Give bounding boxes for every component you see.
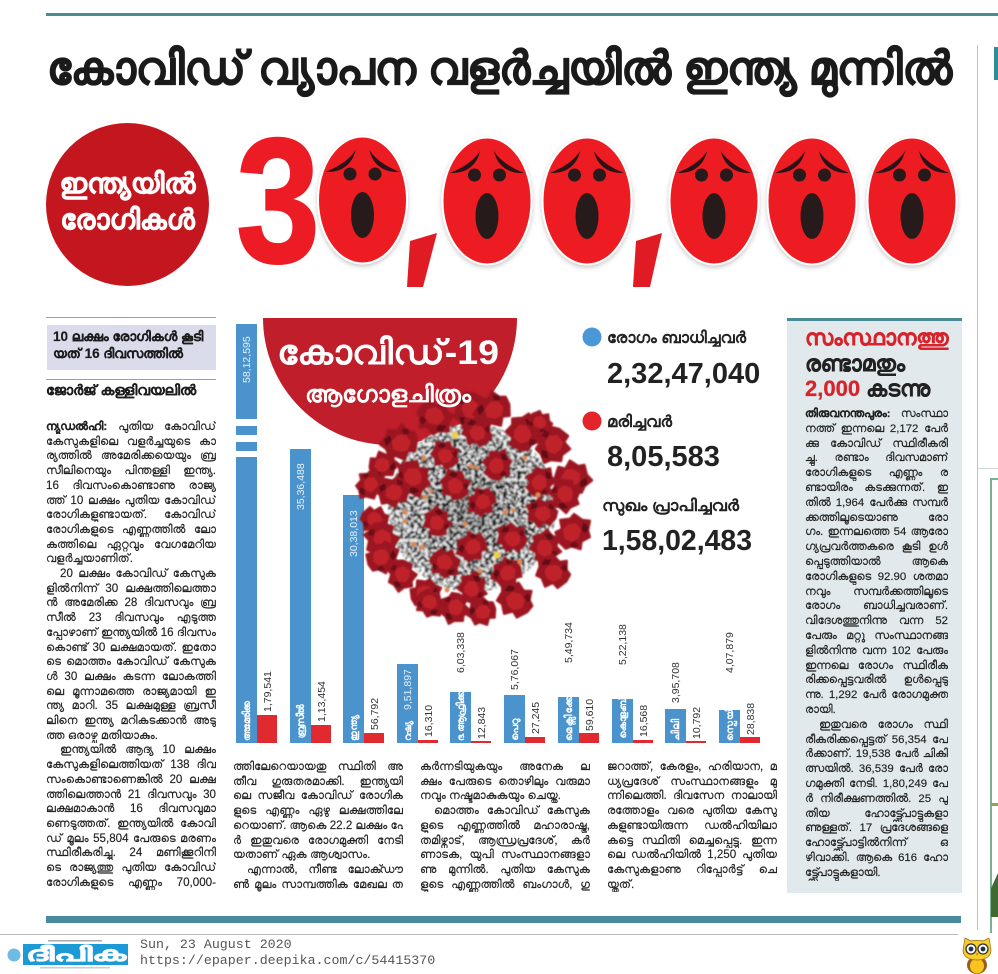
bar chart: country totals	[236, 324, 760, 743]
article column 1: സീൽ 23 ദിവസവും എടുത്ത	[46, 611, 216, 624]
sidebar article: ഴിവാക്കി. ആകെ 616 ഹോ	[805, 852, 948, 864]
article column 1: ടെ രാജ്യത്തു പുതിയ കോവിഡ്	[46, 861, 216, 874]
article column 4: രത്തോളം വരെ പുതിയ കേസു	[607, 804, 777, 817]
sidebar article: ളിൽനിന്നു വന്ന 102 പേരും	[805, 645, 948, 657]
article column 4: കട്ടെ സ്ഥിതി മെച്ചപ്പെട്ടു. ഇന്ന	[607, 834, 777, 846]
article column 1	[46, 420, 216, 890]
article column 3: മൊത്തം കോവിഡ് കേസുക	[434, 804, 590, 817]
bar group: Mexico	[558, 622, 599, 743]
bar group: Brazil: ബ്രസീൽ	[294, 703, 307, 738]
global picture subheading: ആഗോളചിത്രം	[305, 381, 472, 408]
article column 2: എന്നാൽ, നീണ്ട ലോക്ഡൗ	[247, 863, 403, 876]
bar group: Brazil	[290, 449, 331, 743]
sidebar article: രോഗം ബാധിച്ചവരാണ്.	[805, 600, 948, 612]
badge: patients in India	[46, 123, 209, 286]
bar group: Colombia	[612, 624, 653, 743]
article column 4: ന്നിലെത്തി. ദിവസേന നാലായി	[607, 789, 777, 802]
article column 1: ൻ അമേരിക്ക 28 ദിവസവും ബ്ര	[46, 596, 216, 609]
sidebar article: ഇതുവരെ രോഗം സ്ഥി	[819, 719, 948, 731]
footer divider	[0, 934, 958, 935]
article column 2: ൺ മൂലം സാമ്പത്തിക മേഖല ത	[233, 878, 403, 891]
bar group: Chile: ചിലി	[669, 718, 682, 741]
article column 2: ലെ സജീവ കോവിഡ് രോഗിക	[233, 789, 403, 802]
red title semicircle	[263, 318, 517, 445]
bar group: Chile: 3,95,708	[670, 662, 682, 703]
article column 1: രോഗികളുടെ എണ്ണം 70,000-	[46, 876, 216, 889]
bar group: India: 30,38,013	[348, 510, 360, 557]
article column 1: ടെ മൊത്തം കോവിഡ് കേസുക	[46, 655, 216, 668]
covid-19 heading: കോവിഡ്-19	[277, 334, 499, 372]
bar group: Spain: 28,838	[745, 703, 757, 735]
article column 4: യ്തത്.	[607, 878, 634, 891]
sidebar article: ണ്ടായിരം കടക്കുന്നത്. ഇ	[805, 482, 948, 494]
article column 1: ന്ത്യ മാറി. 35 ലക്ഷമുള്ള ബ്രസീ	[46, 699, 216, 712]
bar group: USA: അമേരിക്ക	[240, 700, 253, 741]
sidebar article: നവും സമ്പർക്കത്തിലൂടെ	[805, 586, 948, 598]
bar group: India	[343, 495, 384, 743]
article column 2: ളുടെ എണ്ണം ഏഴു ലക്ഷത്തിലേ	[233, 804, 403, 817]
subhead rule top	[46, 317, 216, 318]
sidebar heading: സംസ്ഥാനത്തു	[805, 325, 949, 350]
sidebar article: ത്സയിൽ. 36,539 പേർ രോ	[805, 763, 948, 775]
bar group: Chile	[665, 662, 706, 743]
bar group: India: ഇന്ത്യ	[349, 715, 361, 741]
bar group: Russia: 9,51,897	[402, 669, 414, 710]
legend: recovered: സുഖം പ്രാപിച്ചവർ	[602, 497, 740, 516]
article column 1: ത്ത ഒരാഴ്ച മതിയാകും.	[46, 729, 158, 742]
article column 1: ഡ് മൂലം 55,804 പേരുടെ മരണം	[46, 832, 216, 845]
source date: Sun, 23 August 2020	[140, 937, 292, 952]
article column 3: കർന്നടിയുകയും അനേക ല	[420, 760, 590, 773]
bar group: Colombia: കൊളംബിയ	[616, 688, 629, 738]
article column 1: ണെടുത്തത്. ഇന്ത്യയിൽ കോവി	[46, 817, 216, 830]
legend: deaths: മരിച്ചവർ	[607, 413, 673, 431]
panel: state news sidebar	[787, 318, 962, 893]
sidebar article: തിയ ഹോട്ട്സ്പോട്ടുകളാ	[805, 808, 948, 820]
article column 3: ണാടക, യുപി സംസ്ഥാനങ്ങളാ	[420, 848, 590, 861]
bar group: Mexico: 59,610	[584, 699, 596, 731]
bar group: Peru: പെറു	[510, 718, 522, 741]
article column 4: കേസുകളാണു റിപ്പോർട്ട് ചെ	[607, 863, 777, 876]
sidebar article: ന്നു. 1,292 പേർ രോഗമുക്ത	[805, 689, 948, 701]
sidebar article: രിക്കപ്പെട്ടവരിൽ ഉൾപ്പെടു	[805, 674, 948, 686]
bar group: Spain: സ്പെയിൻ	[723, 696, 737, 741]
logo: Deepika	[8, 940, 128, 968]
badge: patients in India: ഇന്ത്യയിൽ	[60, 168, 195, 199]
bar group: USA: 58,12,595	[241, 336, 253, 383]
legend: infected	[582, 328, 760, 390]
face zero 5	[768, 138, 856, 264]
face zero 4	[670, 138, 758, 264]
left subhead box: യത് 16 ദിവസത്തിൽ	[53, 346, 183, 361]
sidebar article: ട്ട്സ്പോട്ടുകളായി.	[805, 867, 881, 879]
sidebar article: പേരും മറ്റു സംസ്ഥാനങ്ങ	[805, 630, 948, 642]
article column 1: ഇന്ത്യയിൽ ആദ്യ 10 ലക്ഷം	[60, 743, 216, 756]
article column 1: ത്ത് 10 ലക്ഷം പുതിയ കോവിഡ്	[46, 494, 216, 506]
bar group: South Africa: 12,843	[476, 707, 488, 739]
article column 3: ണു മുന്നിൽ. പുതിയ കേസുക	[420, 863, 590, 876]
article column 1: 20 ലക്ഷം കോവിഡ് കേസുക	[60, 567, 216, 580]
badge: patients in India: രോഗികൾ	[60, 204, 195, 235]
sidebar article: രോഗികളുടെ 92.90 ശതമാ	[805, 571, 948, 583]
neighbouring twig	[991, 803, 998, 806]
article column 4: ജറാത്ത്, കേരളം, ഹരിയാന, മ	[607, 760, 777, 773]
article column 1: ലക്ഷമാകാൻ 16 ദിവസവുമാ	[46, 802, 216, 815]
sidebar article: ഗമുക്തി നേടി. 1,80,249 പേ	[805, 778, 948, 790]
article column 3: തമിഴ്നാട്, ആന്ധ്രപ്രദേശ്, കർ	[420, 834, 590, 846]
legend: infected: രോഗം ബാധിച്ചവർ	[607, 329, 747, 347]
sidebar article: പ്പെടുത്തിയാൽ ആകെ	[805, 556, 948, 568]
article column 3	[420, 760, 590, 892]
article column 1: രോഗികളുടെ എണ്ണത്തിൽ ലോ	[46, 523, 216, 536]
article column 1: ൾ 30 ലക്ഷം കടന്ന ലോകത്തി	[46, 670, 216, 683]
bar group: Colombia: 16,568	[638, 705, 650, 737]
face zero 2	[442, 138, 532, 264]
bar group: USA	[236, 324, 277, 743]
chart panel: global picture	[236, 318, 760, 743]
logo wordmark: ദീപിക	[26, 943, 128, 966]
article column 1: ന്യൂഡൽഹി: പുതിയ കോവിഡ്	[46, 420, 216, 433]
article column 2: യതാണ് ഏക ആശ്വാസം.	[233, 848, 370, 861]
article column 1: സീലിനെയും പിന്തള്ളി ഇന്ത്യ.	[46, 464, 216, 477]
bar group: Russia: റഷ്യ	[403, 721, 415, 741]
bar group: Mexico: മെക്സിക്കോ	[562, 690, 577, 741]
right margin rule	[977, 45, 978, 930]
sidebar article: ഗ്യപ്രവർത്തകരെ കൂടി ഉൾ	[805, 541, 948, 553]
article column 1: ത്തിലെത്താൻ 21 ദിവസവും 30	[46, 788, 216, 800]
neighbouring article box	[990, 478, 998, 933]
article column 3: നവും നഷ്ടമാകുകയും ചെയ്തു.	[420, 789, 561, 802]
article column 3: ളുടെ എണ്ണത്തിൽ മഹാരാഷ്ട്ര,	[420, 819, 590, 832]
article column 2: തീവ ഗുരുതരമാക്കി. ഇന്ത്യയി	[233, 775, 403, 788]
sidebar article: ർ നിരീക്ഷണത്തിൽ. 25 പു	[805, 793, 948, 805]
article column 1: കത്തിലെ ഏറ്റവും വേഗമേറിയ	[46, 538, 216, 551]
article column 1: ലെ മൂന്നാമത്തെ രാജ്യമായി ഇ	[46, 685, 216, 698]
sidebar article: ണുള്ളത്. 17 പ്രദേശങ്ങളെ	[805, 822, 948, 834]
sidebar heading	[805, 325, 950, 401]
bar group: Chile: 10,792	[691, 707, 703, 739]
bar group: South Africa: 6,03,338	[455, 632, 467, 673]
article column 1: സംകൊണ്ടാണെങ്കിൽ 20 ലക്ഷ	[46, 773, 216, 786]
article column 2: റെയാണ്. ആകെ 22.2 ലക്ഷം പേ	[233, 819, 403, 832]
byline: ജോർജ് കള്ളിവയലിൽ	[46, 383, 196, 399]
sidebar article: രോഗികളുടെ എണ്ണം ര	[805, 467, 948, 479]
legend: infected: 2,32,47,040	[607, 358, 760, 390]
legend: recovered	[602, 497, 752, 557]
big number 30,00,000 with faces	[236, 125, 960, 295]
sidebar article: തിൽ 1,964 പേർക്കു സമ്പർ	[805, 497, 948, 509]
sidebar article: ഗം. ഇന്നലത്തെ 54 ആരോ	[805, 526, 948, 538]
bottom rule	[46, 916, 961, 923]
sidebar article	[805, 407, 948, 881]
sidebar article: ഹോട്ട്സ്പോട്ടിൽനിന്ന് ഒ	[805, 837, 948, 849]
top rule	[46, 13, 998, 16]
neighbouring teal tab	[994, 47, 998, 80]
sidebar article: വിദേശത്തുനിന്നു വന്ന 52	[805, 615, 948, 627]
sidebar article: തിരുവനന്തപുരം: സംസ്ഥാ	[805, 408, 948, 420]
bar group: Colombia: 5,22,138	[617, 624, 629, 665]
article column 4: ലെ ഡൽഹിയിൽ 1,250 പുതിയ	[607, 848, 777, 861]
sidebar article: രീകരിക്കപ്പെട്ടത് 56,354 പേ	[805, 734, 948, 746]
legend: recovered: 1,58,02,483	[602, 525, 752, 557]
bar group: Peru	[504, 649, 545, 743]
bar group: Russia	[397, 664, 438, 743]
article column 1: കേസുകളിലെ വളർച്ചയുടെ കാ	[46, 435, 216, 448]
bar group: India: 56,792	[369, 698, 381, 730]
legend: deaths: 8,05,583	[607, 441, 720, 473]
article column 1: 16 ദിവസംകൊണ്ടാണു രാജ്യ	[46, 479, 216, 492]
left subhead box	[47, 325, 216, 370]
article column 1: കേസുകളിലെത്തിയത് 138 ദിവ	[46, 758, 216, 771]
face zero 1	[318, 136, 407, 264]
bar group: Spain	[719, 632, 760, 743]
comma 1	[407, 233, 437, 287]
article column 1: കൊണ്ട് 30 ലക്ഷമായത്. ഇതോ	[46, 640, 216, 654]
article column 2: ത്തിലേറെയായതു സ്ഥിതി അ	[233, 760, 403, 773]
face zero 3	[542, 138, 632, 264]
comma 2	[633, 233, 662, 287]
sidebar article: ക്കു കോവിഡ് സ്ഥിരീകരി	[805, 438, 948, 450]
icon: coronavirus illustration	[354, 385, 597, 631]
article column 2	[233, 760, 403, 892]
neighbouring top rule	[978, 468, 998, 469]
bar group: Russia: 16,310	[423, 705, 435, 737]
article column 1: ര്യത്തിൽ അമേരിക്കയെയും ബ്ര	[46, 449, 216, 462]
article column 1: ളിൽനിന്ന് 30 ലക്ഷത്തിലെത്താ	[46, 582, 216, 595]
left subhead box: 10 ലക്ഷം രോഗികൾ കൂടി	[53, 329, 203, 344]
article column 3: ളുടെ എണ്ണത്തിൽ ബംഗാൾ, ഗു	[420, 878, 590, 891]
article column 1: ലിനെ ഇന്ത്യ മറികടക്കാൻ അടു	[46, 714, 216, 727]
article column 4: ധ്യപ്രദേശ് സംസ്ഥാനങ്ങളും മു	[607, 775, 777, 788]
sidebar article: ച്ചു. രണ്ടാം ദിവസമാണ്	[805, 452, 948, 464]
face zero 6	[868, 138, 956, 264]
sidebar article: നത്ത് ഇന്നലെ 2,172 പേർ	[805, 423, 948, 435]
source url: https://epaper.deepika.com/c/54415370	[140, 953, 435, 968]
sidebar article: ർക്കാണ്. 19,538 പേർ ചികി	[805, 748, 948, 760]
bar group: Brazil: 1,13,454	[316, 681, 328, 722]
bar group: Mexico: 5,49,734	[563, 622, 575, 663]
bar group: Peru: 5,76,067	[509, 649, 521, 690]
article column 1: പ്പോഴാണ് ഇന്ത്യയിൽ 16 ദിവസം	[46, 626, 216, 639]
article column 1: രോഗികളുണ്ടായത്. കോവിഡ്	[46, 508, 216, 521]
sidebar article: ക്കത്തിലൂടെയാണു രോ	[805, 512, 948, 524]
sidebar heading: രണ്ടാമതും	[805, 350, 905, 376]
bar group: Spain: 4,07,879	[724, 632, 736, 673]
neighbouring leaf	[991, 873, 998, 917]
article column 1: സ്ഥിരീകരിച്ചു. 24 മണിക്കൂറിനി	[46, 846, 216, 859]
title: കോവിഡ് വ്യാപന വളർച്ചയിൽ ഇന്ത്യ മുന്നിൽ	[47, 42, 953, 98]
bar group: Peru: 27,245	[530, 702, 542, 734]
article column 2: ർ ഇതുവരെ രോഗമുക്തി നേടി	[233, 834, 403, 846]
bar group: South Africa	[450, 632, 491, 743]
article column 1: വളർച്ചയാണിത്.	[46, 552, 133, 565]
article column 3: ക്ഷം പേരുടെ തൊഴിലും വരുമാ	[420, 775, 590, 788]
legend: deaths	[582, 412, 720, 473]
sidebar article: ഇന്നലെ രോഗം സ്ഥിരീക	[805, 660, 948, 672]
icon: owl mascot	[962, 938, 992, 974]
article column 4	[607, 760, 777, 892]
sidebar article: രായി.	[805, 704, 836, 716]
article column 4: കളുണ്ടായിരുന്ന ഡൽഹിയിലാ	[607, 819, 777, 832]
subhead rule bottom	[46, 379, 216, 380]
logo swirl	[8, 948, 20, 962]
bar group: South Africa: ദ. ആഫ്രിക്ക	[454, 690, 467, 741]
bar group: Brazil: 35,36,488	[295, 463, 307, 510]
bar group: USA: 1,79,541	[262, 671, 274, 712]
sidebar heading: 2,000 കടന്നു	[805, 376, 930, 401]
